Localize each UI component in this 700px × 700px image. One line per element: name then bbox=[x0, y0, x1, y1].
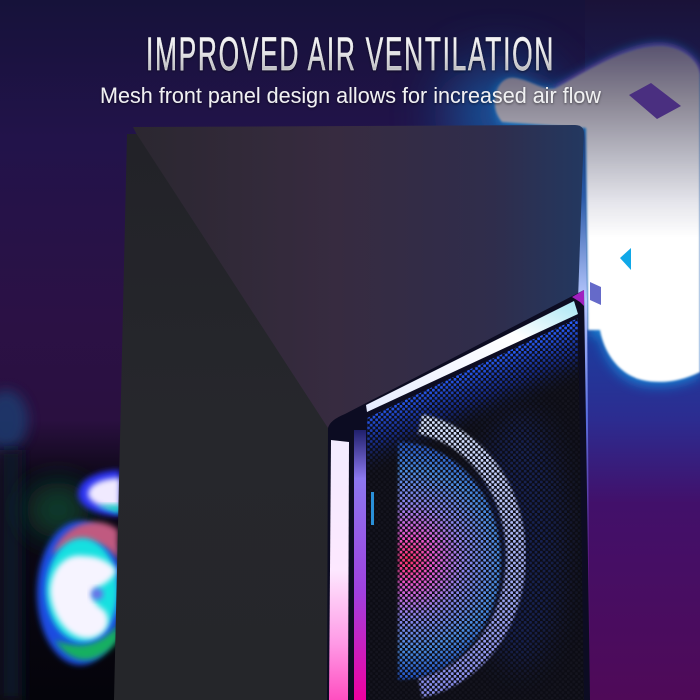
light bar: top diagonal bbox=[366, 301, 578, 412]
neon light details: diamond and cyan notch bbox=[590, 83, 681, 305]
mesh clip latch bbox=[371, 492, 374, 525]
front frame bbox=[327, 290, 590, 700]
blurred neon light: right wall bbox=[495, 46, 700, 386]
fan hub glow bbox=[398, 442, 501, 680]
mesh base bbox=[360, 300, 600, 700]
blurred PC in background: left bbox=[0, 390, 123, 700]
light bar: vertical inner bbox=[354, 430, 366, 700]
subtitle: Mesh front panel design allows for increased air flow bbox=[100, 83, 601, 108]
faint blue glow bbox=[475, 410, 565, 670]
fan ring bbox=[420, 424, 516, 688]
PC case: right edge bbox=[578, 128, 590, 700]
PC case: top front panel bbox=[133, 125, 584, 428]
mesh panel with fan bbox=[367, 318, 584, 700]
PC case: side panel bbox=[114, 134, 360, 700]
mesh sheet bbox=[367, 318, 584, 700]
light bar: vertical outer bbox=[329, 440, 349, 700]
blue reflection bbox=[367, 318, 578, 480]
